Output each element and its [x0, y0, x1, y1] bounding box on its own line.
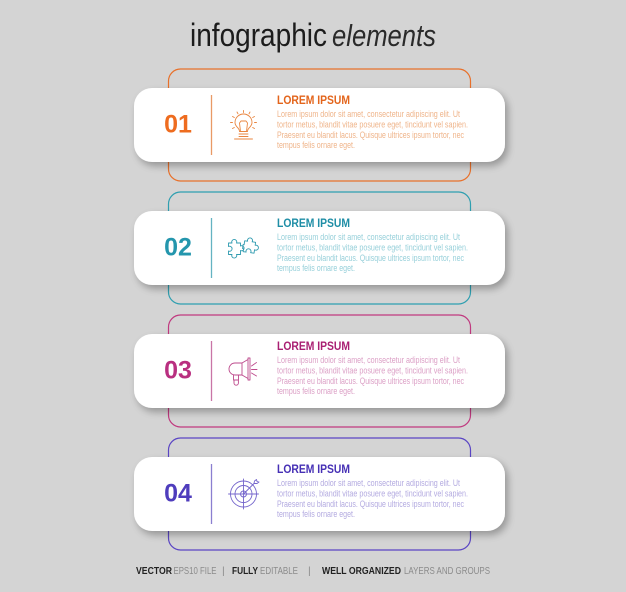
footer caption: LAYERS AND GROUPS	[404, 565, 490, 577]
body text 01	[277, 109, 468, 150]
divider 03	[210, 341, 212, 401]
body text 03	[277, 355, 468, 396]
body text 01: Lorem ipsum dolor sit amet, consectetur adipiscing elit. Ut	[277, 109, 460, 119]
number 01: 01	[164, 110, 192, 138]
body text 02	[277, 232, 468, 273]
body text 02: Lorem ipsum dolor sit amet, consectetur adipiscing elit. Ut	[277, 232, 460, 242]
card 03	[134, 334, 505, 408]
icon: light bulb	[230, 110, 256, 139]
title: infographic	[190, 17, 327, 53]
divider 02	[210, 218, 212, 278]
card 04	[134, 457, 505, 531]
card 02	[134, 211, 505, 285]
body text 03: Praesent eu blandit lacus. Quisque ultrices ipsum tortor, nec	[277, 376, 464, 386]
heading 02: LOREM IPSUM	[277, 218, 350, 230]
body text 02: Praesent eu blandit lacus. Quisque ultrices ipsum tortor, nec	[277, 253, 464, 263]
title	[190, 17, 436, 53]
body text 02: tempus felis ornare eget.	[277, 263, 355, 273]
outline frame 01	[168, 69, 470, 181]
body text 03: tortor metus, blandit vitae posuere eget, tincidunt vel sapien.	[277, 366, 468, 376]
body text 01: Praesent eu blandit lacus. Quisque ultrices ipsum tortor, nec	[277, 130, 464, 140]
outline frame 03	[168, 315, 470, 427]
outline frame 04	[168, 438, 470, 550]
footer caption: |	[222, 565, 225, 577]
outline frame 02	[168, 192, 470, 304]
body text 04: tortor metus, blandit vitae posuere eget, tincidunt vel sapien.	[277, 488, 468, 498]
body text 04: tempus felis ornare eget.	[277, 509, 355, 519]
body text 04	[277, 478, 468, 519]
divider 04	[210, 464, 212, 524]
icon: puzzle pieces	[228, 237, 260, 258]
panel: step 02	[134, 192, 505, 304]
body text 01: tempus felis ornare eget.	[277, 140, 355, 150]
icon: target with dart	[228, 479, 259, 509]
footer caption: |	[308, 565, 311, 577]
panel: step 03	[134, 315, 505, 427]
divider 01	[210, 95, 212, 155]
number 04: 04	[164, 480, 192, 508]
footer caption: FULLY	[232, 565, 258, 577]
body text 04: Praesent eu blandit lacus. Quisque ultrices ipsum tortor, nec	[277, 499, 464, 509]
card 01	[134, 88, 505, 162]
footer caption	[136, 565, 490, 577]
footer caption: EDITABLE	[260, 565, 298, 577]
body text 03: Lorem ipsum dolor sit amet, consectetur adipiscing elit. Ut	[277, 355, 460, 365]
number 02: 02	[164, 234, 192, 262]
footer caption: EPS10 FILE	[174, 565, 216, 577]
panel: step 01	[134, 69, 505, 181]
footer caption: VECTOR	[136, 565, 172, 577]
number 03: 03	[164, 356, 192, 384]
heading 01: LOREM IPSUM	[277, 95, 350, 107]
panel: step 04	[134, 438, 505, 550]
icon: megaphone	[229, 358, 257, 385]
heading 03: LOREM IPSUM	[277, 341, 350, 353]
body text 04: Lorem ipsum dolor sit amet, consectetur adipiscing elit. Ut	[277, 478, 460, 488]
heading 04: LOREM IPSUM	[277, 464, 350, 476]
body text 02: tortor metus, blandit vitae posuere eget, tincidunt vel sapien.	[277, 242, 468, 252]
body text 03: tempus felis ornare eget.	[277, 386, 355, 396]
title: elements	[332, 18, 436, 53]
body text 01: tortor metus, blandit vitae posuere eget, tincidunt vel sapien.	[277, 120, 468, 130]
footer caption: WELL ORGANIZED	[322, 565, 401, 577]
